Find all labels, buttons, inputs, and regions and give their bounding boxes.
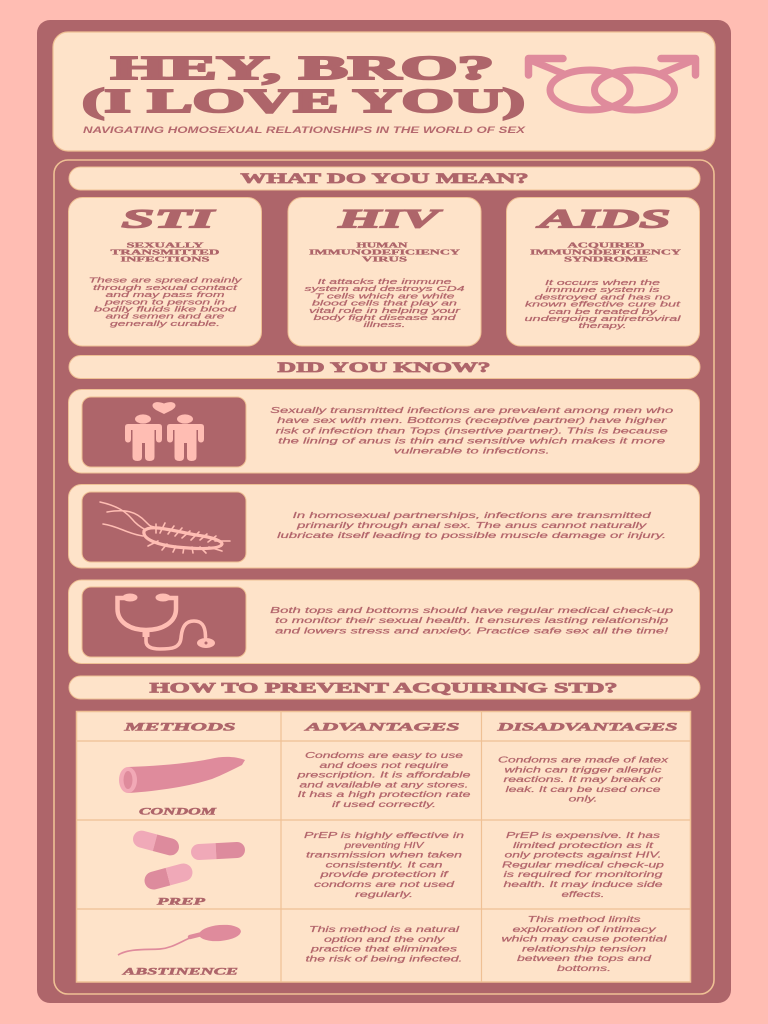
advantages: condom: Condoms are easy to use <box>305 751 464 760</box>
advantages: prep: transmission when taken <box>306 851 463 860</box>
title: (I LOVE YOU) <box>82 83 525 120</box>
disadvantages: condom: only. <box>568 795 598 804</box>
advantages: abstinence: option and the only <box>324 935 446 944</box>
text block: vulnerable to infections. <box>394 446 550 456</box>
icon: stethoscope <box>82 587 246 657</box>
panel: STI: INFECTIONS <box>120 254 210 264</box>
disadvantages: prep: Regular medical check-up <box>502 860 665 869</box>
disadvantages: abstinence: which may cause potential <box>502 935 667 944</box>
advantages: condom: prescription. It is affordable <box>296 771 471 780</box>
text block <box>277 511 666 540</box>
main content panel <box>54 160 714 994</box>
panel: AIDS: AIDS <box>535 204 670 234</box>
disadvantages: abstinence: bottoms. <box>557 964 611 973</box>
disadvantages: prep: is required for monitoring <box>504 870 663 879</box>
advantages: prep: PrEP is highly effective in <box>304 831 465 840</box>
icon: interlocked male symbols <box>528 58 696 110</box>
panel: HIV: vital role in helping your <box>309 306 461 315</box>
table header: ADVANTAGES <box>304 720 460 734</box>
panel: STI: TRANSMITTED <box>110 248 221 256</box>
text block: In homosexual partnerships, infections are transmitted <box>293 511 652 520</box>
panel: HIV: HUMAN <box>356 240 409 250</box>
advantages: prep: preventing HIV <box>343 841 424 850</box>
disadvantages: abstinence: This method limits <box>528 915 640 924</box>
advantages: condom: It has a high protection rate <box>298 790 471 799</box>
panel: STI: person to person in <box>103 297 225 306</box>
advantages: prep: condoms are not used <box>314 880 455 889</box>
panel: AIDS <box>506 198 700 346</box>
title: HEY, BRO? <box>111 50 494 87</box>
disadvantages: prep: PrEP is expensive. It has <box>506 831 660 840</box>
advantages: abstinence: This method is a natural <box>309 925 459 934</box>
panel: AIDS: destroyed and has no <box>534 292 670 301</box>
panel: AIDS: known effective cure but <box>525 300 682 309</box>
advantages: abstinence: the risk of being infected. <box>306 954 462 963</box>
advantages: abstinence <box>306 925 462 963</box>
disadvantages: condom: reactions. It may break or <box>504 775 663 784</box>
icon: prep pills <box>131 829 245 892</box>
panel: STI: generally curable. <box>110 319 220 328</box>
panel: HIV: It attacks the immune <box>318 277 452 286</box>
advantages: condom <box>296 751 471 809</box>
disadvantages: prep: limited protection as it <box>513 841 654 850</box>
panel: STI: through sexual contact <box>93 283 239 292</box>
advantages: condom: and available at any stores. <box>300 780 468 789</box>
advantages: prep <box>304 831 465 899</box>
advantages: condom: if used correctly. <box>332 800 436 809</box>
label: prep: PREP <box>157 896 206 906</box>
table: prevention methods <box>76 711 691 982</box>
panel: STI: bodily fluids like blood <box>94 304 238 314</box>
text block: have sex with men. Bottoms (receptive partner) have higher <box>277 416 667 425</box>
icon: sperm <box>118 923 242 955</box>
table header: DISADVANTAGES <box>496 720 678 734</box>
disadvantages: prep: only protects against HIV. <box>504 851 662 860</box>
advantages: abstinence: practice that eliminates <box>309 945 457 954</box>
disadvantages: abstinence: exploration of intimacy <box>512 925 657 934</box>
text block: Both tops and bottoms should have regular medical check-up <box>270 606 674 615</box>
icon: condom <box>119 757 245 793</box>
panel: HIV: system and destroys CD4 <box>304 284 464 293</box>
panel: fact 3 <box>68 580 700 664</box>
panel: HIV <box>288 198 481 346</box>
disadvantages: prep <box>502 831 665 899</box>
panel: AIDS: immune system is <box>546 285 660 294</box>
panel: HIV: body fight disease and <box>314 313 457 322</box>
panel: STI: and semen and are <box>106 312 224 321</box>
panel: AIDS: can be treated by <box>548 307 659 316</box>
disadvantages: abstinence: relationship tension <box>522 944 647 953</box>
advantages: prep: provide protection if <box>319 870 449 879</box>
heading: what do you mean: WHAT DO YOU MEAN? <box>240 171 528 187</box>
heading: what do you mean <box>69 167 700 190</box>
heading: how to prevent: HOW TO PREVENT ACQUIRING STD? <box>150 680 618 696</box>
panel: HIV: VIRUS <box>362 254 407 264</box>
disadvantages: condom <box>498 756 670 804</box>
disadvantages: abstinence: between the tops and <box>517 954 652 963</box>
panel: HIV: illness. <box>364 320 406 329</box>
table header <box>123 720 678 734</box>
panel: AIDS: IMMUNODEFICIENCY <box>530 248 682 256</box>
panel: AIDS: ACQUIRED <box>568 240 646 250</box>
panel: STI: These are spread mainly <box>88 276 244 285</box>
panel: HIV: blood cells that play an <box>312 299 457 308</box>
disadvantages: condom: which can trigger allergic <box>504 765 662 774</box>
disadvantages: abstinence <box>502 915 667 973</box>
text block: and lowers stress and anxiety. Practice safe sex all the time! <box>275 626 670 636</box>
advantages: prep: regularly. <box>355 890 413 899</box>
text block: risk of infection than Tops (insertive partner). This is because <box>276 426 669 435</box>
panel: AIDS: therapy. <box>578 321 626 330</box>
label: abstinence: ABSTINENCE <box>121 966 238 976</box>
advantages: prep: consistently. It can <box>326 860 443 869</box>
heading: how to prevent <box>69 676 700 699</box>
table header: METHODS <box>123 720 236 734</box>
text block: to monitor their sexual health. It ensures lasting relationship <box>275 616 669 625</box>
panel: STI <box>68 198 262 346</box>
label: condom: CONDOM <box>139 806 218 816</box>
panel: fact 1 <box>68 390 700 473</box>
disadvantages: prep: effects. <box>562 890 604 899</box>
text block: Sexually transmitted infections are prevalent among men who <box>270 406 674 415</box>
text block: lubricate itself leading to possible muscle damage or injury. <box>277 531 666 540</box>
panel: STI: STI <box>122 204 215 234</box>
panel: STI: SEXUALLY <box>126 240 205 250</box>
heading: did you know: DID YOU KNOW? <box>278 360 490 376</box>
subtitle: NAVIGATING HOMOSEXUAL RELATIONSHIPS IN THE WORLD OF SEX <box>83 125 527 135</box>
panel: AIDS: It occurs when the <box>545 278 660 287</box>
text block <box>270 606 674 636</box>
panel: AIDS: SYNDROME <box>564 254 648 264</box>
disadvantages: condom: Condoms are made of latex <box>498 756 670 764</box>
heading: did you know <box>69 356 700 378</box>
header panel <box>53 32 715 151</box>
panel: AIDS: undergoing antiretroviral <box>524 314 681 323</box>
disadvantages: prep: health. It may induce side <box>504 880 663 889</box>
panel: STI: and may pass from <box>106 290 224 299</box>
text block: the lining of anus is thin and sensitive which makes it more <box>278 436 666 445</box>
panel: HIV: HIV <box>336 204 444 234</box>
icon: two men with heart <box>82 397 246 467</box>
text block <box>270 406 674 456</box>
title <box>82 50 525 120</box>
icon: bacterium <box>82 492 246 562</box>
disadvantages: condom: leak. It can be used once <box>506 785 661 794</box>
panel: HIV: T cells which are white <box>314 291 454 300</box>
panel: HIV: IMMUNODEFICIENCY <box>309 248 461 256</box>
text block: primarily through anal sex. The anus cannot naturally <box>295 521 648 530</box>
panel: fact 2 <box>68 484 700 568</box>
advantages: condom: and does not require <box>320 761 449 770</box>
